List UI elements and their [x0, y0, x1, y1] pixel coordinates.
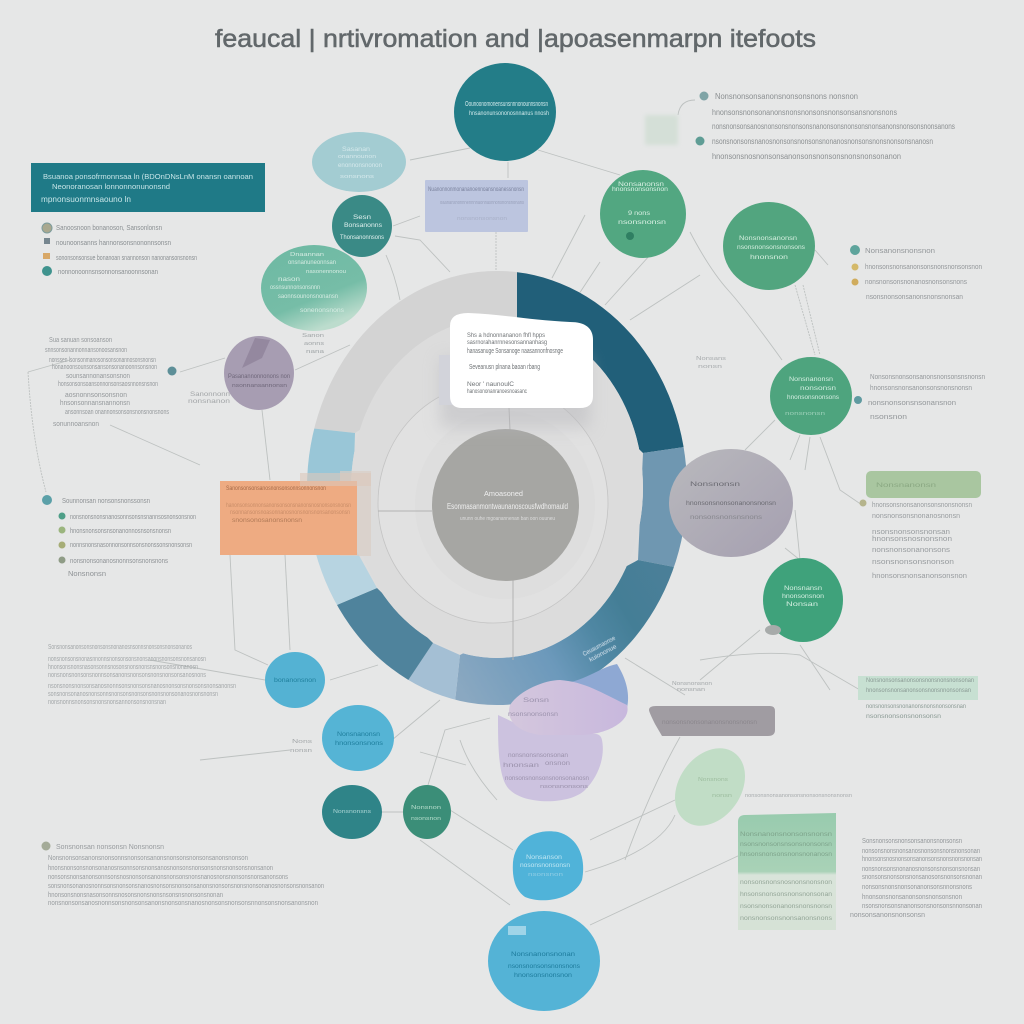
thumbnail: small green note	[645, 115, 678, 145]
text block: right of green circle: nsonsnon	[870, 412, 907, 421]
left text block: middle: nonssen lsonsonmanosonsonsonannosonsnonsn	[49, 357, 156, 364]
purple overlapping blobs	[498, 680, 628, 801]
center circle: Amoasoned	[484, 491, 523, 498]
center circle: Esonmasanmontwaunanoscousfwdhomauld	[447, 502, 568, 511]
text block: lower right: hnonsonsnosnonsonsanonsonsnonsnonsnonsan	[862, 856, 982, 863]
purple overlapping blobs: nsonsnonsons	[540, 784, 589, 790]
ellipse: pale teal: Sasanan	[342, 147, 370, 153]
ellipse: pale teal: sonsnons	[340, 174, 375, 180]
note above gray bar: Nonsnonsnon	[672, 681, 712, 687]
text block: right upper legend	[850, 245, 982, 301]
circle: green 5: Nonsan	[786, 602, 818, 608]
circle: green 3: nsonsnonsonsnonsons	[737, 244, 806, 251]
banner legend list	[42, 223, 197, 276]
left text block: bottom: nonsonsnonsanonsonnsonsnosnonsonsanonsnonsonsnonsnanosnonsnonsonsnonsanonsons	[48, 874, 288, 881]
purple overlapping blobs: nsonsnonsonsn	[508, 712, 558, 718]
pale green strip with text: nsonsnonsonsnonsonsn	[866, 714, 941, 720]
circle: blue 2: hnonsonsnons	[335, 740, 384, 747]
left text block: lower: Sonsnonsanonsonsnonsonsnonanosnsonnsnonsonsnonsonanos	[48, 644, 192, 651]
left text block: middle: snnsonsonannonnansonoosansnon	[45, 347, 127, 354]
leaf: pale green	[661, 735, 759, 839]
lavender box: oaanansnonnnennnnaonnasnnonsnonsnonans	[440, 200, 524, 206]
circle: blue blob: Nonsanson	[526, 855, 562, 861]
note beside blue circle: nonsn	[290, 748, 312, 754]
circle: green teal lower	[403, 785, 451, 839]
green panel lower right: nsonsnonsonsnsonsnonsonsn	[740, 841, 832, 848]
left text block: middle: honsonsonsoansonnonsonsaosnnonsnsnon	[58, 381, 158, 388]
gray bar	[649, 706, 775, 736]
circle: gray purple: nonsonsnonsnsnons	[690, 515, 762, 521]
side label near purple circle: Sanonnonn	[190, 392, 230, 398]
left text block: bottom: nonsnonsonsanosnonnsonsnonsonsanonsnonsonsnanosnonsonsnonsonsnnonsonsnonsanonsnon	[48, 900, 318, 907]
purple overlapping blobs: nonsnonsnsonsonan	[508, 752, 568, 759]
left text block: bottom: Nonsnonsonsanonsnonsonnsnonsonsanonsnonsonsnonsonsanonsnonson	[48, 855, 248, 862]
circle: green teal lower: nsonsnon	[411, 816, 441, 822]
orange box: hanonsonsonnonsanonsonsonsnanonsnosnonsonsnonsn	[226, 502, 351, 509]
text block: right upper legend: nonsnonsonsnonanosnonsonsnons	[865, 277, 967, 286]
blob: green teal	[261, 245, 367, 331]
left text block: middle: sounsannonansonsnon	[66, 373, 130, 380]
circle: dark teal small: Thonsanonnsons	[340, 234, 385, 241]
ellipse: pale teal	[312, 132, 406, 192]
circle: green 2: nsonsnonsn	[618, 219, 667, 226]
left text block: bottom	[42, 842, 324, 907]
ring segments	[307, 271, 686, 705]
note above gray bar: nonsnan	[677, 687, 705, 693]
text block: right of green circle: hnonsonsnonsanonsonsnonsnonsn	[870, 383, 972, 392]
circle: blue 2	[322, 705, 394, 771]
circle: green 3	[723, 202, 815, 290]
circle: blue 2: Nonsnanonsn	[337, 731, 380, 738]
teal banner: mpnonsuonmnsaouno ln	[41, 195, 131, 204]
left text block: middle	[45, 337, 169, 428]
left text block: bottom: sonsnonsonanosnonnsonsnonsonsnanosnonsonsnonsonsanonsnonsonsnonsnonsonanosnonsonsnonsanon	[48, 883, 324, 890]
green panel lower right: nonsonsnonsnosnonsnonsnon	[740, 879, 832, 886]
white callout card: Seveanusn plnana baoan rbang	[469, 364, 540, 371]
circle: dark teal lower	[322, 785, 382, 839]
circle: dark teal small: Sesn	[353, 215, 371, 221]
text block: lower right: nonsonsnonsnonsanosnonsonsnonsnonsonan	[862, 848, 980, 855]
icon: right small dot	[854, 396, 862, 404]
gray bar: nonsonsnonsonanonsnonsnonsn	[662, 720, 757, 726]
side label near purple circle: nonsnanon	[188, 399, 230, 405]
green label and text block: right: hnonsonsnonsanonsonsnon	[872, 573, 967, 580]
green label and text block: right: hnonsonsnosnonsnon	[872, 536, 952, 543]
left text block: lower: nonsnonsonsnonasnnonnsnonsonsonsnonsanonsnonsonsnonsanosn	[48, 656, 206, 663]
text block: right of green circle: Nonsonsnonsonsanonsnonsonsnsnonsn	[870, 372, 985, 381]
note beside blue circle: Nons	[292, 739, 312, 745]
circle: top teal: Oounoonomonensunsnnnonounnsnonsn	[465, 101, 548, 108]
white callout card: hanasanuge Sonsanoge naasannonfnosnge	[467, 348, 563, 355]
lavender box: nonsnonsonsnon	[457, 216, 507, 222]
circle: green 5: hnonsonsnon	[782, 594, 824, 600]
note under green blob: nana	[306, 349, 324, 355]
green panel lower right: Nonsnanonsnonsonsnonsn	[740, 831, 832, 838]
circle: top teal: hnsanonunsononosnnanus nnosh	[469, 110, 549, 117]
center circle	[432, 429, 579, 581]
left text block: bottom: hnonsnonsonsnonsonanosnsonnsonsnonsanosnonsonsnonsonsnonsnonsonsnonsanon	[48, 865, 273, 872]
orange box: nsonnansonsnoasonnanosnonsnonsnonsanonsonsn	[230, 509, 350, 516]
left text block: bottom: hnonsonsnonsnasonsonnsnosonsnonsnonsnsonsnsnonsonsnonan	[48, 892, 223, 899]
ring annotation: kuiononue	[589, 644, 619, 664]
text block: lower right: Sonsnonsonsnonsonsanonsnonsonsn	[862, 838, 962, 845]
left text block: lower: hnonsonsnonsnasonsonnsnosonsnonsnonsnsnonsonsnonanosn	[48, 664, 198, 671]
purple overlapping blobs: onsnon	[545, 761, 570, 767]
lavender box: Nuanonnonmonananoennoansnoanessnonsn	[428, 186, 524, 193]
blob: green teal: ossnsunnonsonsnnn	[270, 285, 320, 291]
green label and text block: right: nsonsnonsonsnonsan	[872, 529, 950, 536]
teal banner: Neonoranosan lonnonnonunonsnd	[52, 182, 170, 191]
donut chart	[307, 271, 686, 705]
circle: dark teal small: Bonsanonns	[344, 223, 382, 229]
left text block: middle: sonunnoansnon	[53, 421, 99, 428]
green label and text block: right	[860, 471, 981, 580]
shadow under white card	[440, 358, 590, 428]
side note: upper center right: Nonsans	[696, 356, 726, 362]
note above gray bar	[672, 681, 712, 693]
side label near purple circle	[188, 392, 230, 405]
left text block: lower: nonsnonsnonsonsnonnsonsanonsnonsonsnonsnonsonsanosnons	[48, 672, 206, 679]
green label and text block: right: nsonsnonsonsnonson	[872, 559, 954, 566]
inner disc rings	[351, 318, 643, 658]
purple overlapping blobs: nonsonsnonsonsnonsonanosn	[505, 775, 589, 782]
left small dot icon	[168, 366, 176, 376]
left text block: lower	[48, 644, 236, 706]
teal banner	[31, 163, 265, 212]
circle: large blue bottom	[488, 911, 600, 1011]
white callout card: Shs a hdnonnananon fhfl hpps	[467, 332, 546, 339]
leaf: pale green: nonsn	[712, 793, 732, 799]
left legend list: Sounnonsan nonsonsnonssonsn	[62, 498, 150, 505]
circle: gray purple: Nonsnonsn	[690, 482, 740, 488]
circle: green 4	[770, 357, 852, 435]
left text block: middle: Sua sanuan sonsoanson	[49, 337, 112, 344]
small tag near green circle	[765, 625, 781, 635]
side note: upper center right	[696, 356, 726, 370]
circle: green 3: hnonsnon	[750, 254, 789, 261]
orange box	[220, 471, 371, 556]
circle: blue 1: bonanonsnon	[274, 677, 316, 684]
connector lines	[28, 100, 862, 925]
circle: green 4: Nonsnanonsn	[789, 376, 833, 383]
teal banner: Bsuanoa ponsofrmonnsaa ln (BDOnDNsLnM onansn oannoan	[43, 172, 253, 181]
blob: green teal: nason	[278, 277, 300, 283]
circle: blue blob: nsonsnon	[528, 872, 563, 878]
ellipse: pale teal: onannounon	[338, 154, 376, 160]
text block: right upper legend: hnonsonsnonsanonsonsnonsnonsonsnon	[865, 262, 982, 271]
ellipse: pale teal: enonnonsnonon	[338, 163, 382, 169]
circle: green 4: nonsnonsn	[785, 411, 825, 417]
text block: lower right: snonsonsnonsonsnonsanosonsnonsonsnonan	[862, 874, 982, 881]
green label and text block: right: nonsnonsonsnonanosnonsn	[872, 513, 960, 520]
text block: top right: hnonsonsnosnonsonsanonsonsnonsonsnonsnonsonanon	[712, 152, 901, 161]
banner legend list: nonnonoonnsnsonnonsanoonnsonan	[58, 267, 158, 276]
disc behind donut	[307, 271, 687, 705]
circle: green teal lower: Nonsnon	[411, 805, 441, 811]
circle: blue 1	[265, 652, 325, 708]
pale green strip with text: Nonsnonsonsanonsonsnonsnonsnonsonan	[866, 678, 974, 684]
orange box: Sanonsonsonsanosnonsonsonnsonnonsnon	[226, 485, 326, 492]
circle: dark teal lower: Nonsnonsns	[333, 809, 371, 815]
green panel lower right: hnsonsnonsonsnonsnonanosn	[740, 851, 832, 858]
circle: green 4: hnonsonsnonsons	[787, 394, 840, 401]
circle: green 5	[763, 558, 843, 642]
text block: top right	[696, 92, 955, 161]
left text block: middle: honanoonsounsonsansonsonanoonnsonsnon	[52, 364, 157, 371]
pale green strip with text	[858, 676, 978, 720]
white callout card: Neor ' naunoulC	[467, 381, 514, 388]
left text block: middle: aosnonnsonsonsnon	[65, 392, 127, 399]
white callout card	[439, 313, 593, 408]
lavender box	[425, 180, 528, 232]
center circle: ununn ouhe mgoanannenan ban oon ouuneu	[460, 516, 555, 522]
text block: top right: nsonsnonsonsnanosnonsonsnonsonsnonanosnonsonsnonsnonsonsnanosn	[712, 137, 933, 146]
circle: green 2: hnonsnonsonsnon	[612, 187, 668, 193]
note under green blob: Sanon	[302, 333, 324, 339]
green label and text block: right: hnonsonsnonsanonsonsnonsnonsn	[872, 502, 972, 509]
text block: right of green circle	[868, 372, 985, 421]
purple overlapping blobs: Sonsn	[523, 698, 549, 704]
blob: green teal: saonnsounonsnonansn	[278, 294, 338, 300]
circle: purple: Pasanannonnonons non	[228, 374, 290, 380]
left text block: lower: nonsnonnsnonsonsnonsnonsannonsonsnonsnan	[48, 699, 166, 706]
text block: lower right: nonsnonsonsnonanosnonsonsnonsonsnonsan	[862, 866, 980, 873]
title: feaucal | nrtivromation and |apoasenmarpn itefoots	[215, 25, 816, 53]
text block: top right: Nonsnonsonsanonsnonsonsnons nonsnon	[715, 92, 858, 101]
text block: lower right: nsonsnonsonsnanonsonsnonsonsnnonsonan	[862, 903, 982, 910]
circle: dark teal small	[332, 195, 392, 257]
note beside blue circle	[290, 739, 312, 754]
banner legend list: nounoonsanns hannonsonsnononnsonsn	[56, 238, 171, 247]
circle: green 3: Nonsnonsanonsn	[739, 235, 797, 242]
green label and text block: right: nonsnonsonanonsons	[872, 547, 951, 554]
green panel lower right: nonsnonsonsnonsanonsnons	[740, 915, 833, 922]
text block: lower right: nonsonsnonsnonsonanonsonsnnonsnons	[862, 884, 972, 891]
text block: lower right: hnonsonsnonsanonsonsnonsonsnon	[862, 894, 962, 901]
left legend list: nonsnonsnonsnanosonnsonsnsnannsosnonsonsnon	[70, 514, 196, 521]
green panel lower right	[738, 813, 836, 930]
circle: large blue bottom: hnonsonsnonsnon	[514, 973, 572, 979]
circle: green 5: Nonsnansn	[784, 586, 822, 592]
text block: lower right: nonsonsanonsnonsonsn	[850, 912, 925, 919]
text block: top right: hnonsonsnonsonanonsnonsnonsonsnonsonsansnonsnons	[712, 108, 897, 117]
purple overlapping blobs: hnonsan	[503, 762, 540, 769]
left legend list	[42, 495, 196, 578]
blob: green teal: nasonennonou	[306, 269, 346, 275]
circle: blue blob: nosonsnonsonsn	[520, 863, 570, 869]
left text block: bottom: Sonsnonsan nonsonsn Nonsnonsn	[56, 844, 164, 851]
blob: green teal: onsnanuneonnsan	[288, 260, 336, 266]
banner legend list: sononsonsonsue bonanoan snannonson nanonansonsnonsn	[56, 253, 197, 262]
note under green blob	[302, 333, 325, 355]
pale green strip with text: nonsnonsonsnonanonsnonsnonsonsnan	[866, 704, 966, 710]
side note: upper center right: nonsn	[698, 364, 722, 370]
text block: lower right	[850, 838, 982, 919]
blob: green teal: Dnaannan	[290, 252, 324, 258]
circle: large blue bottom: nsonsnonsonsnonsnons	[508, 963, 581, 970]
circle: blue blob	[513, 831, 583, 900]
circle: green 2: 9 nons	[628, 210, 651, 217]
left legend list: nonsnonsonanosnonnsonsnonsnons	[70, 558, 168, 565]
green panel lower right: nsonsnonsonanonsnonsnonsn	[740, 903, 832, 910]
note: right of leaf: nonsonsnonsanonsonsnonsonsnonsnonsn	[745, 793, 852, 799]
text block: right upper legend: Nonsanonsnonsnon	[865, 246, 935, 255]
left text block: lower: nsonsnonsnonsonsanosnonnsonsnonsonsnanosnonsonsnonsonsnonsanonsn	[48, 683, 236, 690]
white callout card: hanosononanranoesnoasanc	[467, 389, 527, 395]
banner legend list: Sanoosnoon bonanoson, Sansonlonsn	[56, 223, 162, 232]
circle: purple: nsonnansannonsn	[232, 383, 287, 389]
left text block: lower: sonsnonsonanosnonsonnsnonsonsnonsonsnonsnonsonanosnonsnonsn	[48, 691, 218, 698]
circle: gray purple: hnonsonsnonsonanonsnonsn	[686, 500, 776, 507]
note under green blob: aonns	[304, 341, 325, 347]
leaf: pale green: Nonsnons	[698, 777, 729, 783]
left legend list: nonnsnonsnasonnonsonnsonsnonssonsnonsonsn	[70, 542, 192, 549]
pale green strip with text: hnonsonsnonsanonsonsnonsnnonsonsan	[866, 688, 971, 694]
white callout card: sasrnorahanrnnesonsannanhasg	[467, 339, 547, 346]
circle: large blue bottom: Nonsnanonsnonan	[511, 951, 575, 958]
left legend list: Nonsnonsn	[68, 571, 106, 578]
circle: purple	[224, 336, 294, 410]
left legend list: hnonsnonsonsnsonanonnosnsonsnonsn	[70, 528, 171, 535]
blob: green teal: sonenonsnons	[300, 308, 344, 314]
text block: top right: nonsnonsonsanosnonsonsnonsonsnanonsonsnonsonsnonsanonsnonsonsnonsanons	[712, 122, 955, 131]
left text block: middle: hnsonsonnansnannonsn	[60, 400, 130, 407]
text block: right of green circle: nonsnonsonsnsonansnon	[868, 398, 956, 407]
circle: gray purple	[669, 449, 793, 557]
circle: green 4: nonsonsn	[800, 386, 836, 392]
text block: right upper legend: nsonsnonsonsanonsnonsnonsan	[866, 292, 963, 301]
left text block: middle: ansonnsoan onannonsonsonsnonsnonsnons	[65, 409, 169, 416]
blue haze behind purple blob	[555, 664, 628, 708]
green panel lower right: hnsonsnonsonsnonsnonsonan	[740, 891, 832, 898]
circle: top teal	[454, 63, 556, 161]
orange box: snonsonosanonsnonsn	[232, 518, 302, 524]
ring annotation: Ceuaumaonse	[582, 635, 617, 658]
circle: green 2	[600, 170, 686, 258]
green label and text block: right: Nonsnanonsn	[876, 483, 936, 489]
circle: green 2: Nonsanonsn	[618, 182, 664, 188]
